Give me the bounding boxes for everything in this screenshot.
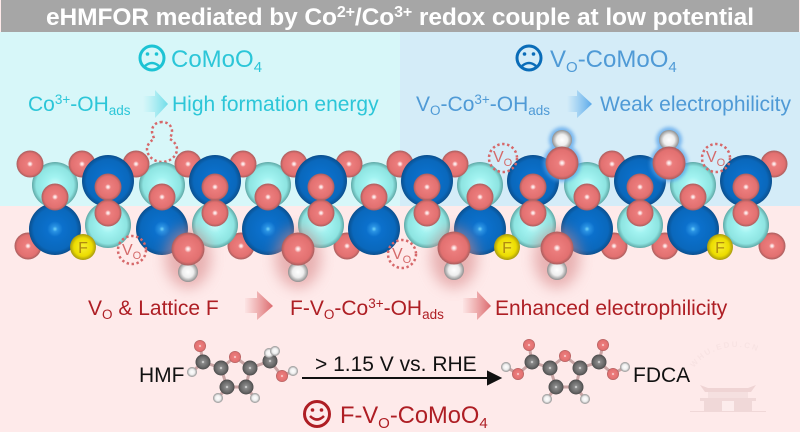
title: eHMFOR mediated by Co	[46, 4, 337, 31]
title: 3+	[394, 4, 412, 21]
reaction arrow	[302, 372, 500, 384]
label: F-VO-Co3+-OHads: ads	[422, 307, 444, 322]
label: Co3+-OHads: Co	[28, 93, 55, 116]
fluorine atoms: F	[78, 240, 88, 257]
arrow cyan	[143, 90, 168, 118]
label: reaction condition: > 1.15 V vs. RHE	[315, 353, 477, 376]
label: Co3+-OHads: -OH	[70, 93, 109, 116]
heading: F-VO-CoMoO4	[304, 402, 488, 432]
label: FDCA: FDCA	[633, 364, 690, 387]
oxygen vacancy markers: V	[392, 246, 403, 263]
arrow blue	[567, 90, 592, 118]
oxygen vacancy markers: V	[706, 149, 717, 166]
title banner	[1, 0, 799, 32]
lower row blue atoms	[29, 203, 719, 255]
label: F-VO-Co3+-OHads: F-V	[290, 297, 324, 320]
lower row oxygen atoms	[14, 232, 786, 260]
upper adsorbed hydroxyl groups	[546, 130, 686, 180]
oxygen vacancy markers	[118, 144, 730, 268]
VO-CoMoO4 label: 4	[668, 59, 677, 76]
icon: smiley face red	[304, 402, 330, 426]
oxygen vacancy markers: O	[504, 157, 513, 169]
blue glow around upper OH	[543, 127, 688, 182]
label: Co3+-OHads: ads	[109, 103, 131, 118]
F-VO-CoMoO4 label: O	[378, 415, 390, 432]
crystal slab	[14, 150, 788, 260]
red glow under adsorbed OH	[165, 228, 580, 288]
label: VO-Co3+-OHads: O	[430, 103, 441, 118]
arrow red 1	[245, 291, 273, 320]
fluorine atoms: F	[715, 240, 725, 257]
watermark	[690, 385, 766, 412]
arrow red 2	[463, 291, 491, 320]
oxygen vacancy markers: O	[717, 157, 726, 169]
label: VO & Lattice F: & Lattice F	[113, 297, 219, 320]
VO-CoMoO4 label: O	[566, 59, 578, 76]
top row blue atoms	[82, 155, 772, 207]
label: Enhanced electrophilicity: Enhanced electrophilicity	[495, 297, 728, 320]
oxygen vacancy markers: O	[133, 250, 142, 262]
label: VO & Lattice F: O	[102, 307, 113, 322]
label: F-VO-Co3+-OHads: O	[324, 307, 334, 322]
label: Weak electrophilicity: Weak electrophilicity	[600, 93, 792, 116]
label: HMF: HMF	[139, 364, 184, 387]
lower row teal atoms	[85, 202, 769, 248]
label: F-VO-Co3+-OHads: -Co	[334, 297, 368, 320]
CoMoO4 label: CoMoO	[171, 46, 254, 73]
F-VO-CoMoO4 label: F-V	[340, 403, 378, 429]
fluorine atoms	[70, 234, 733, 260]
CoMoO4 label: 4	[254, 59, 262, 76]
label: VO-Co3+-OHads: -Co	[441, 93, 474, 116]
VO-CoMoO4 label: V	[550, 46, 566, 73]
panel: F-VO-CoMoO4 background	[0, 206, 800, 432]
lower adsorbed hydroxyl groups	[172, 232, 574, 282]
icon: sad face cyan	[140, 46, 164, 70]
heading: VO-CoMoO4	[517, 46, 677, 76]
top row teal atoms	[32, 162, 716, 208]
label: Co3+-OHads: 3+	[55, 92, 70, 107]
panel: VO-CoMoO4 background	[400, 32, 800, 206]
oxygen vacancy markers: O	[403, 254, 412, 266]
F-VO-CoMoO4 label: 4	[479, 415, 488, 432]
label: VO-Co3+-OHads: -OH	[490, 93, 528, 116]
oxygen vacancy markers: V	[493, 149, 504, 166]
title: 2+	[337, 4, 355, 21]
bridging oxygen atoms	[42, 174, 760, 226]
top row oxygen atoms	[16, 150, 788, 178]
molecule: FDCA	[501, 339, 630, 404]
label: VO-Co3+-OHads: ads	[528, 103, 550, 118]
title: /Co	[355, 4, 394, 31]
label: F-VO-Co3+-OHads: 3+	[368, 296, 384, 311]
fluorine atoms: F	[502, 240, 512, 257]
VO-CoMoO4 label: -CoMoO	[578, 46, 668, 73]
icon: sad face blue	[517, 46, 541, 70]
heading: CoMoO4	[140, 46, 262, 76]
missing OH dotted outline	[147, 122, 177, 162]
label: F-VO-Co3+-OHads: -OH	[384, 297, 422, 320]
label: High formation energy: High formation energy	[172, 93, 379, 116]
molecule: HMF	[187, 340, 298, 403]
oxygen vacancy markers: V	[122, 242, 133, 259]
label: VO-Co3+-OHads: V	[416, 93, 430, 116]
label: VO-Co3+-OHads: 3+	[474, 92, 490, 107]
watermark: WHU.EDU.CN	[688, 340, 761, 369]
panel: CoMoO4 background	[0, 32, 400, 206]
F-VO-CoMoO4 label: -CoMoO	[390, 403, 479, 429]
label: VO & Lattice F: V	[88, 297, 102, 320]
title: redox couple at low potential	[412, 4, 754, 31]
